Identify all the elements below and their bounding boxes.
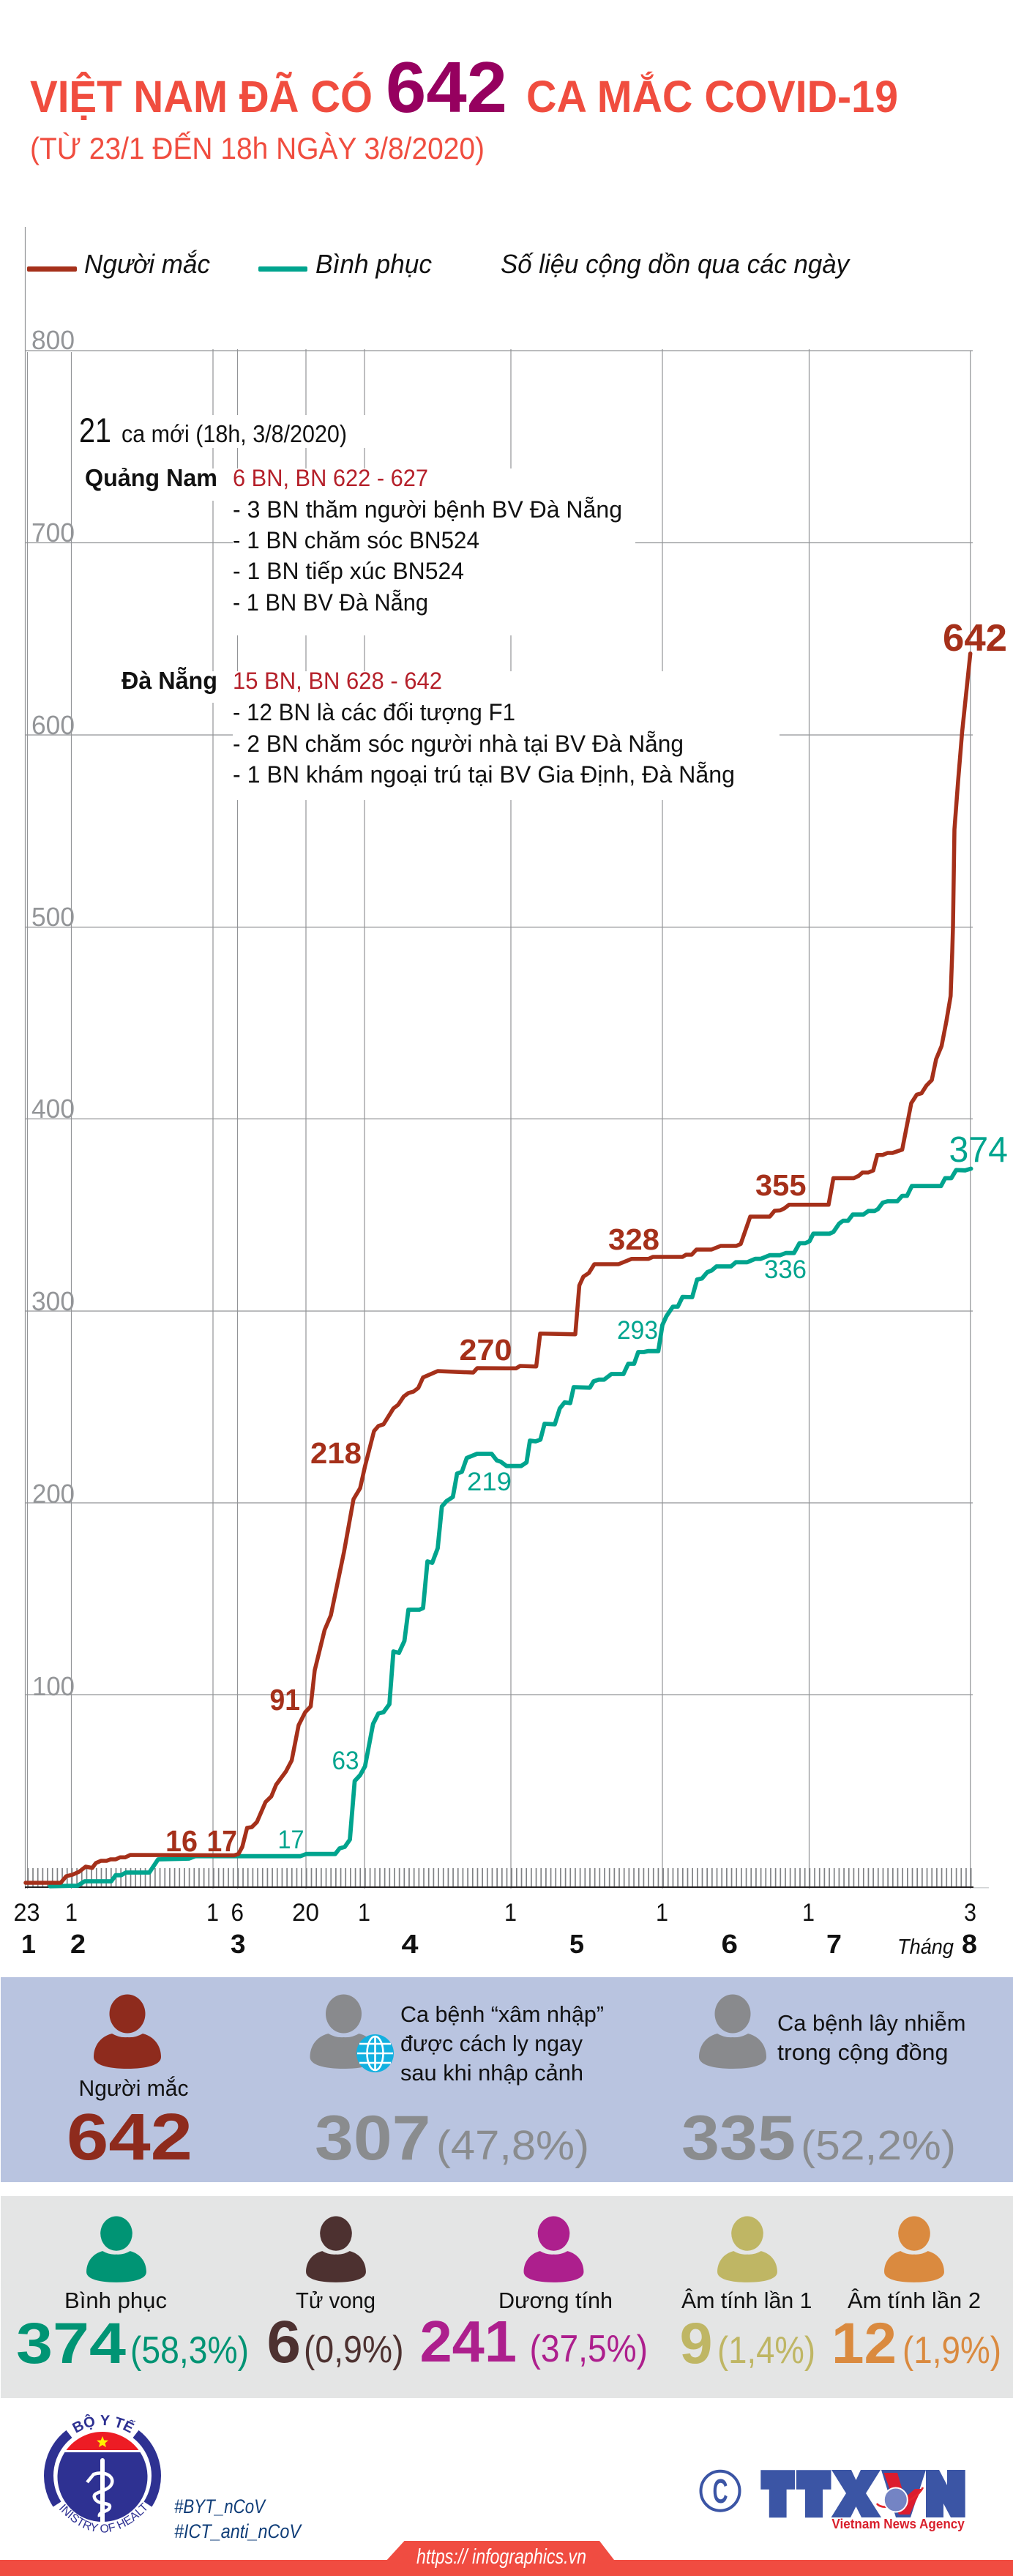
stat: deaths (266, 2217, 404, 2375)
data labels: recovered: 17 (278, 1826, 304, 1854)
title: 642 (386, 47, 507, 127)
annotation: 21 new cases: ca mới (18h, 3/8/2020) (122, 420, 347, 447)
x axis month labels: 2 (70, 1929, 86, 1959)
agency name: Vietnam News Agency (831, 2517, 965, 2531)
data labels: confirmed: 16 (165, 1824, 198, 1858)
legend: Người mắc (84, 249, 210, 279)
icon: person imported with globe (310, 1994, 394, 2072)
annotation: Quảng Nam cases: - 1 BN BV Đà Nẵng (233, 589, 428, 616)
stat: negative once: (1,4%) (717, 2329, 815, 2372)
annotation: Đà Nẵng cases: - 2 BN chăm sóc người nhà tại BV Đà Nẵng (233, 731, 684, 757)
y axis labels: 100 (32, 1671, 75, 1701)
annotation: Quảng Nam cases: Quảng Nam (85, 464, 217, 491)
annotation: Quảng Nam cases (85, 464, 622, 616)
data labels: confirmed: 642 (943, 617, 1007, 660)
x axis day labels: 1 (206, 1899, 219, 1927)
white masks behind annotation text (73, 415, 780, 800)
x axis baseline (25, 1886, 989, 1889)
y axis labels: 300 (31, 1286, 75, 1316)
chart grid (25, 227, 973, 1889)
stat: deaths: 6 (266, 2309, 301, 2375)
annotation: Quảng Nam cases: - 1 BN chăm sóc BN524 (233, 527, 479, 553)
number: community cases: (52,2%) (801, 2122, 956, 2169)
number: imported cases: (47,8%) (436, 2122, 589, 2169)
annotation: 21 new cases: 21 (79, 411, 111, 449)
y axis labels: 800 (31, 325, 75, 355)
y axis labels: 400 (31, 1094, 75, 1124)
TTXVN mark (760, 2470, 965, 2517)
annotation: Quảng Nam cases: - 1 BN tiếp xúc BN524 (233, 558, 464, 584)
legend: Bình phục (315, 249, 432, 279)
x axis day labels: 1 (656, 1899, 668, 1927)
stat: negative twice: 12 (831, 2310, 897, 2375)
x axis month labels: 8 (962, 1929, 977, 1959)
subtitle: date range: (TỪ 23/1 ĐẾN 18h NGÀY 3/8/2020) (30, 131, 485, 165)
data labels: recovered: 63 (332, 1747, 359, 1775)
y axis labels: 600 (31, 710, 75, 740)
annotation: Đà Nẵng cases: - 12 BN là các đối tượng F1 (233, 699, 515, 725)
annotation: Đà Nẵng cases: Đà Nẵng (122, 666, 217, 694)
number: community cases (681, 2103, 956, 2173)
data labels: recovered: 336 (764, 1255, 807, 1284)
annotation: Đà Nẵng cases (122, 666, 735, 788)
hashtags (174, 2495, 303, 2542)
x axis day labels: 23 (13, 1899, 40, 1927)
panel: case origin (1, 1977, 1013, 2182)
x axis day labels: 1 (358, 1899, 370, 1927)
copyright mark: C (713, 2472, 728, 2510)
number: confirmed total: 642 (67, 2101, 192, 2174)
label: community cases: trong cộng đồng (777, 2039, 949, 2065)
title (30, 47, 898, 127)
stat: positive: (37,5%) (530, 2328, 648, 2370)
hashtags: #ICT_anti_nCoV (174, 2520, 303, 2542)
hashtags: #BYT_nCoV (174, 2495, 266, 2517)
chart: cumulative cases line chart (13, 227, 1008, 1959)
x axis day labels (13, 1899, 976, 1927)
x axis day labels: 6 (231, 1899, 244, 1927)
title: CA MẮC COVID-19 (526, 72, 898, 122)
x axis month labels: Tháng (897, 1935, 954, 1959)
number: imported cases: 307 (315, 2103, 430, 2173)
x axis month labels: 5 (569, 1929, 584, 1959)
annotation: Quảng Nam cases: 6 BN, BN 622 - 627 (233, 465, 428, 491)
data labels: confirmed: 218 (310, 1436, 362, 1470)
y axis labels: 700 (31, 518, 75, 548)
stat: negative once: 9 (679, 2310, 713, 2375)
label: imported cases: sau khi nhập cảnh (400, 2060, 583, 2086)
label: confirmed: Người mắc (79, 2075, 189, 2101)
logo: Ministry of Health (44, 2414, 161, 2533)
icon: person community (699, 1994, 766, 2069)
day ticks along the axis (28, 1868, 973, 1887)
x axis month labels: 1 (21, 1929, 36, 1959)
data labels: confirmed: 91 (269, 1683, 300, 1717)
x axis month labels: 4 (401, 1929, 419, 1959)
logo: TTXVN Vietnam News Agency (701, 2470, 965, 2531)
stat: deaths: Tử vong (296, 2288, 375, 2313)
copyright mark (701, 2471, 739, 2511)
x axis month labels (21, 1929, 977, 1959)
data labels: confirmed (165, 617, 1007, 1858)
x axis day labels: 3 (964, 1899, 976, 1927)
stat: negative once (679, 2217, 815, 2375)
stat: positive: Dương tính (498, 2288, 613, 2313)
y axis labels: 500 (31, 902, 75, 932)
confirmed cases line (26, 654, 971, 1883)
number: imported cases (315, 2103, 589, 2173)
x axis day labels: 1 (504, 1899, 517, 1927)
data labels: confirmed: 270 (460, 1333, 512, 1367)
legend: Số liệu cộng dồn qua các ngày (501, 249, 851, 279)
label: imported cases: Ca bệnh “xâm nhập” (400, 2001, 604, 2027)
annotation: Đà Nẵng cases: 15 BN, BN 628 - 642 (233, 668, 442, 694)
annotation: 21 new cases (79, 411, 347, 449)
y axis labels: 200 (32, 1479, 75, 1509)
data labels: recovered: 219 (467, 1468, 512, 1496)
annotation: Quảng Nam cases: - 3 BN thăm người bệnh BV Đà Nẵng (233, 496, 622, 523)
stat: recovered: (58,3%) (130, 2329, 249, 2372)
x axis month labels: 7 (826, 1929, 842, 1959)
stat: positive: 241 (420, 2309, 517, 2374)
label: imported cases: được cách ly ngay (400, 2031, 583, 2056)
recovered line (50, 1168, 971, 1886)
label: community cases: Ca bệnh lây nhiễm (777, 2010, 966, 2036)
data labels: confirmed: 328 (608, 1222, 659, 1256)
logo: Ministry of Health: BỘ Y TẾ (72, 2414, 136, 2433)
label: community cases (777, 2010, 966, 2065)
stat: negative once: Âm tính lần 1 (681, 2288, 812, 2313)
x axis day labels: 1 (65, 1899, 78, 1927)
stat: negative twice: Âm tính lần 2 (848, 2288, 981, 2313)
x axis day labels: 20 (292, 1899, 319, 1927)
footer bar with website: https:// infographics.vn (416, 2545, 586, 2569)
stat: negative twice (831, 2217, 1001, 2375)
stat: recovered: Bình phục (64, 2288, 167, 2313)
data labels: recovered: 293 (617, 1316, 658, 1345)
number: community cases: 335 (681, 2103, 796, 2173)
legend (27, 249, 851, 279)
label: imported cases (400, 2001, 604, 2086)
panel: treatment outcomes (1, 2196, 1013, 2398)
data labels: confirmed: 17 (206, 1824, 237, 1858)
footer bar with website (0, 2541, 1013, 2576)
annotation: Đà Nẵng cases: - 1 BN khám ngoại trú tại BV Gia Định, Đà Nẵng (233, 761, 735, 788)
stat: positive (420, 2217, 648, 2374)
data labels: recovered (278, 1130, 1008, 1854)
stat: deaths: (0,9%) (304, 2329, 404, 2371)
x axis month labels: 6 (722, 1929, 738, 1959)
stat: negative twice: (1,9%) (902, 2329, 1001, 2372)
icon: person confirmed (94, 1994, 161, 2069)
stat: recovered (16, 2217, 249, 2375)
y axis labels (31, 325, 75, 1701)
data labels: recovered: 374 (949, 1130, 1008, 1170)
x axis month labels: 3 (231, 1929, 246, 1959)
title: VIỆT NAM ĐÃ CÓ (30, 72, 373, 122)
x axis day labels: 1 (802, 1899, 815, 1927)
data labels: confirmed: 355 (755, 1168, 807, 1202)
stat: recovered: 374 (16, 2310, 126, 2375)
